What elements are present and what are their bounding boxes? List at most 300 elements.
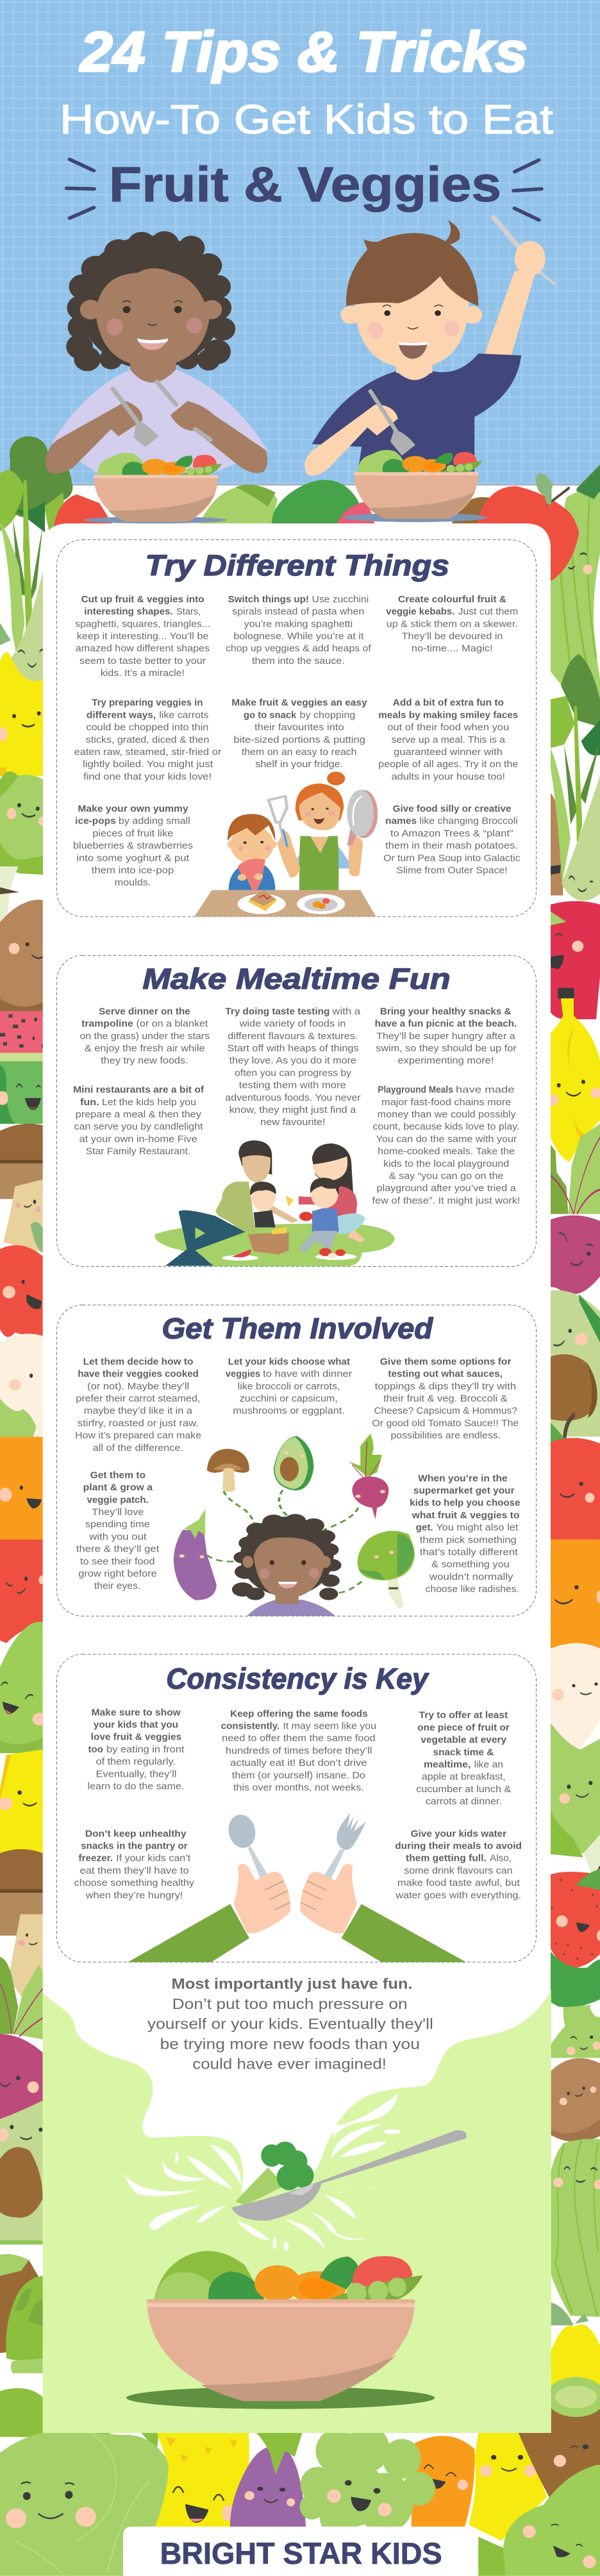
tip: water bbox=[395, 1828, 522, 1901]
tip: supermarket: what fruit & veggies to bbox=[412, 1510, 519, 1521]
cucumber bbox=[551, 2139, 600, 2317]
tip: ice-pops: them into ice-pop bbox=[92, 865, 174, 876]
cauliflower bbox=[0, 1334, 43, 1437]
kiwi bbox=[519, 2433, 600, 2501]
tip: smiley faces bbox=[378, 697, 518, 782]
tip: taste testing: they love. As you do it more bbox=[229, 1055, 356, 1066]
tip: taste testing: wide variety of foods in bbox=[239, 1019, 346, 1030]
tip: switch things up: Use zucchini bbox=[312, 594, 369, 605]
apple bbox=[551, 507, 579, 581]
tip: how cooked: stirfry, roasted or just raw. bbox=[78, 1418, 199, 1428]
mushroom bbox=[207, 1449, 249, 1492]
bottom veg band bbox=[0, 2325, 600, 2576]
illustration: girl eating bbox=[46, 231, 268, 523]
tip: easy snack: Make fruit & veggies an easy bbox=[231, 697, 367, 708]
logo text: BRIGHT STAR KIDS bbox=[160, 2536, 442, 2570]
tip: preparing veggies: different ways, bbox=[87, 709, 156, 720]
tip: how cooked: have their veggies cooked bbox=[78, 1369, 199, 1380]
tip: supermarket: You might also let bbox=[436, 1522, 519, 1533]
lemon bbox=[558, 988, 574, 999]
mother bbox=[269, 772, 378, 890]
tip: switch things up: bolognese. While you’re at it bbox=[233, 631, 364, 641]
tip: how cooked: maybe they’d like it in a bbox=[84, 1405, 193, 1416]
tip: taste testing: testing them with more bbox=[239, 1080, 346, 1091]
mushroom bbox=[0, 1849, 43, 1890]
tip: smiley faces: serve up a meal. This is a bbox=[392, 734, 506, 745]
tip: keep offering: them (or yourself) insane. Do bbox=[232, 1770, 365, 1781]
tip: playground meals bbox=[372, 1085, 521, 1206]
tip: show your love: by eating in front bbox=[106, 1744, 185, 1755]
tip: how cooked: Let them decide how to bbox=[83, 1356, 194, 1367]
girl bbox=[232, 1514, 342, 1616]
tip: every snack time bbox=[416, 1710, 511, 1807]
heading: Consistency is Key bbox=[166, 1663, 429, 1695]
tip: supermarket: supermarket get your bbox=[413, 1486, 515, 1496]
lemon bbox=[551, 2325, 600, 2373]
header plaid background bbox=[0, 0, 600, 484]
title line: 24 Tips & Tricks: 24 Tips & Tricks bbox=[79, 20, 528, 83]
tip: kebabs: veggie kebabs. bbox=[386, 606, 454, 617]
tip: sauces: toppings & dips they’ll try with bbox=[375, 1381, 516, 1392]
tip: creative names: them in their mash potatoes. bbox=[385, 840, 518, 851]
tip: shapes bbox=[75, 594, 210, 679]
face bbox=[396, 359, 433, 373]
tip: kebabs: no-time.... Magic! bbox=[412, 643, 493, 654]
big lettuce bbox=[0, 2429, 171, 2576]
title line: Fruit & Veggies: Fruit & Veggies bbox=[109, 157, 501, 212]
illustration: boy eating bbox=[304, 217, 555, 522]
shirt bbox=[52, 369, 268, 473]
tip: veggie patch: plant & grow a bbox=[83, 1482, 153, 1493]
tip: beach picnic: They’ll be super hungry after a bbox=[376, 1031, 515, 1042]
tip: ice-pops: Make your own yummy bbox=[78, 803, 188, 815]
tip: water: some drink flavours can bbox=[404, 1865, 513, 1876]
raspberry bbox=[551, 901, 600, 1019]
stalk bbox=[551, 2004, 600, 2058]
lemon bbox=[0, 1749, 43, 1853]
tip: preparing veggies: could be chopped into thin bbox=[86, 722, 208, 733]
tip: supermarket: wouldn’t normally bbox=[429, 1572, 513, 1582]
tip: ice-pops: into some yoghurt & put bbox=[76, 852, 190, 863]
tip: smiley faces: meals by making smiley faces bbox=[378, 709, 518, 720]
tip: beach picnic: Bring your healthy snacks & bbox=[380, 1006, 512, 1017]
white splash bbox=[124, 2094, 401, 2251]
tip: how cooked: (or not). Maybe they’ll bbox=[87, 1381, 189, 1392]
tip: keep offering: Keep offering the same foods bbox=[230, 1708, 368, 1719]
left veg border, upper bbox=[0, 444, 47, 1540]
tip: trampoline: on the grass) under the stars bbox=[79, 1031, 210, 1042]
fennel bbox=[13, 518, 43, 609]
parsley bbox=[561, 654, 600, 727]
shirt bbox=[312, 353, 521, 471]
tomato bbox=[563, 1412, 575, 1440]
tip: easy snack bbox=[231, 697, 367, 770]
tip: switch things up: chop up veggies & add heaps of bbox=[226, 643, 372, 654]
pear bbox=[0, 1622, 43, 1752]
tip: every snack time: like an bbox=[474, 1759, 503, 1770]
tip: veggie patch: grow right before bbox=[78, 1568, 157, 1579]
tip: preparing veggies bbox=[74, 697, 221, 782]
tip: easy snack: them on an easy to reach bbox=[242, 747, 356, 758]
tip: water: them getting full. bbox=[406, 1853, 487, 1864]
tip: supermarket: kids to help you choose bbox=[410, 1498, 521, 1509]
tip: water: make food taste awful, but bbox=[397, 1877, 521, 1888]
basket bbox=[248, 1232, 288, 1255]
tip: veggie patch bbox=[76, 1470, 160, 1591]
tip: keep offering: need to offer them the same food bbox=[222, 1733, 376, 1744]
closing message: yourself or your kids. Eventually they'll bbox=[147, 2015, 433, 2032]
right veg border, upper bbox=[545, 466, 600, 1539]
mother bbox=[299, 1143, 365, 1242]
tip: kebabs: Just cut them bbox=[458, 606, 518, 617]
tip: veggie patch: there & they’ll get bbox=[76, 1544, 160, 1555]
left column: lettuce bbox=[0, 2388, 43, 2437]
tip: unhealthy snacks: snacks in the pantry or bbox=[81, 1841, 188, 1851]
strawberry bbox=[551, 1872, 600, 1968]
tip: mini restaurants: Star Family Restaurant. bbox=[86, 1146, 190, 1157]
tip: creative names: like changing Broccoli bbox=[419, 816, 518, 827]
left hand with spoon bbox=[128, 1814, 290, 1962]
tip: mini restaurants: prepare a meal & then they bbox=[76, 1109, 202, 1120]
tip: creative names: Give food silly or creative bbox=[393, 803, 511, 815]
tip: sauces: Give them some options for bbox=[380, 1356, 512, 1367]
section: Make Mealtime Fun bbox=[56, 956, 536, 1266]
fennel and potato bbox=[564, 741, 600, 824]
bowl of salad bbox=[344, 513, 487, 522]
tip: show your love: Make sure to show bbox=[92, 1707, 181, 1718]
tip: sauces: their fruit & veg. Broccoli & bbox=[383, 1393, 508, 1404]
green leaf under pear bbox=[478, 2537, 505, 2576]
tip: kebabs: Create colourful fruit & bbox=[398, 594, 506, 605]
left veg border, lower bbox=[0, 1539, 47, 2373]
heading: Get Them Involved bbox=[162, 1312, 434, 1344]
eggplant bbox=[230, 2433, 306, 2533]
tip: creative names: Slime from Outer Space! bbox=[396, 865, 508, 876]
child two bbox=[285, 1178, 339, 1253]
tip: playground meals: have made bbox=[456, 1085, 515, 1096]
tip: unhealthy snacks: choose something healthy bbox=[74, 1877, 195, 1888]
tip: taste testing: new favourite! bbox=[260, 1117, 326, 1128]
watermelon bbox=[0, 1011, 43, 1055]
tip: preparing veggies: Try preparing veggies in bbox=[92, 697, 203, 708]
illustration: foreground vegetables behind bowls bbox=[0, 436, 600, 552]
mushroom bbox=[0, 1124, 43, 1162]
arm and fork bbox=[304, 405, 398, 476]
tip: veggie patch: their eyes. bbox=[94, 1580, 140, 1591]
tip: every snack time: carrots at dinner. bbox=[426, 1796, 502, 1807]
tip: choose veggies: to have with dinner bbox=[263, 1369, 352, 1380]
tip: taste testing: different flavours & textures. bbox=[228, 1031, 358, 1042]
tomato bbox=[0, 1539, 43, 1643]
tip: unhealthy snacks bbox=[74, 1828, 195, 1901]
tip: choose veggies: like broccoli or carrots, bbox=[238, 1381, 340, 1392]
tip: veggie patch: Get them to bbox=[90, 1470, 146, 1480]
tip: playground meals: major fast-food chains more bbox=[381, 1097, 511, 1108]
tip: preparing veggies: sticks, grated, diced & then bbox=[86, 734, 209, 745]
tip: smiley faces: guaranteed winner with bbox=[394, 747, 503, 758]
tip: playground meals: Playground Meals bbox=[378, 1085, 453, 1096]
tip: preparing veggies: lightly boiled. You might just bbox=[83, 759, 213, 770]
section: Get Them Involved bbox=[56, 1305, 536, 1616]
tip: supermarket: get. bbox=[416, 1522, 433, 1533]
tip: trampoline: they try new foods. bbox=[101, 1055, 188, 1066]
tip: veggie patch: with you out bbox=[88, 1531, 147, 1542]
tip: shapes: kids. It’s a miracle! bbox=[101, 668, 185, 679]
tip: smiley faces: out of their food when you bbox=[387, 722, 509, 733]
lettuce bbox=[551, 1750, 600, 1853]
tip: trampoline bbox=[79, 1006, 210, 1066]
illustration: spoon over salad bowl bbox=[124, 2094, 467, 2409]
orange bbox=[0, 1437, 43, 1540]
tip: playground meals: & say “you can go on the bbox=[389, 1171, 503, 1182]
grass bbox=[154, 1223, 395, 1266]
tip: kebabs: up & stick them on a skewer. bbox=[387, 618, 518, 629]
closing message: could have ever imagined! bbox=[192, 2055, 387, 2072]
tip: how cooked: prefer their carrot steamed, bbox=[76, 1393, 200, 1404]
tip: easy snack: their favourites into bbox=[254, 722, 344, 733]
tip: water: water goes with everything. bbox=[395, 1890, 521, 1901]
right hand with fork bbox=[300, 1813, 466, 1962]
potato bbox=[0, 900, 43, 1011]
tip: supermarket: When you’re in the bbox=[418, 1473, 508, 1484]
tip: playground meals: You can do the same with your bbox=[376, 1133, 517, 1144]
potato bbox=[551, 2058, 600, 2141]
tip: mini restaurants: at your own in-home Five bbox=[79, 1133, 197, 1144]
tip: keep offering bbox=[221, 1708, 376, 1793]
tip: switch things up bbox=[226, 594, 372, 666]
eggplant bbox=[174, 1509, 217, 1600]
tip: preparing veggies: like carrots bbox=[159, 709, 208, 720]
tip: taste testing: adventurous foods. You never bbox=[225, 1092, 361, 1103]
tip: show your love: your kids that you bbox=[94, 1719, 178, 1731]
lemon bbox=[0, 652, 44, 776]
tip: playground meals: home-cooked meals. Take the bbox=[378, 1146, 515, 1157]
tip: every snack time: mealtime, bbox=[424, 1759, 471, 1770]
watermelon plate bbox=[222, 1255, 258, 1260]
illustration: mother and son cooking bbox=[194, 772, 378, 917]
tip: show your love: learn to do the same. bbox=[87, 1781, 184, 1792]
tip: mini restaurants: can serve you by candlelight bbox=[74, 1121, 203, 1132]
green closing background bbox=[43, 1990, 551, 2433]
tip: show your love: Eventually, they’ll bbox=[96, 1768, 176, 1779]
tip: mini restaurants: fun. bbox=[80, 1097, 99, 1108]
tip: taste testing: Try doing taste testing bbox=[225, 1006, 329, 1017]
tip: shapes: spaghetti, squares, triangles... bbox=[75, 618, 210, 629]
tip: playground meals: count, because kids love to play. bbox=[372, 1121, 519, 1132]
tip: trampoline: & enjoy the fresh air while bbox=[85, 1043, 205, 1054]
tip: every snack time: vegetable at every bbox=[421, 1734, 507, 1745]
beet bbox=[551, 1216, 600, 1322]
tip: every snack time: cucumber at lunch & bbox=[416, 1784, 511, 1795]
table bbox=[194, 890, 376, 917]
right veg border, lower bbox=[551, 1539, 600, 2373]
tip: playground meals: kids to the local playground bbox=[383, 1158, 509, 1169]
face bbox=[80, 300, 101, 319]
tip: switch things up: Switch things up! bbox=[228, 594, 309, 605]
tip: ice-pops: by adding small bbox=[119, 816, 190, 827]
spoon bbox=[231, 2130, 467, 2221]
heading: Make Mealtime Fun bbox=[142, 962, 451, 995]
pear bbox=[503, 2465, 600, 2576]
tip: trampoline: trampoline bbox=[81, 1019, 133, 1030]
tip: shapes: Stars, bbox=[176, 606, 201, 617]
tip: sauces: possibilities are endless. bbox=[391, 1430, 501, 1441]
tip: easy snack: by chopping bbox=[300, 709, 355, 720]
tip: shapes: seem to taste better to your bbox=[79, 656, 206, 666]
tip: unhealthy snacks: freezer. bbox=[78, 1853, 113, 1864]
tip: choose veggies: mushrooms or eggplant. bbox=[233, 1405, 345, 1416]
tip: choose veggies: Let your kids choose what bbox=[228, 1356, 350, 1367]
title emphasis rays bbox=[67, 159, 542, 220]
title line: How-To Get Kids to Eat: How-To Get Kids to Eat bbox=[60, 96, 553, 142]
plates bbox=[238, 894, 286, 914]
closing message: be trying more new foods than you bbox=[160, 2035, 420, 2052]
hair bbox=[66, 231, 235, 371]
avocado bbox=[551, 1290, 600, 1437]
tip: mini restaurants bbox=[73, 1085, 204, 1157]
tip: water: Give your kids water bbox=[411, 1828, 506, 1839]
tip: ice-pops: ice-pops bbox=[75, 816, 116, 827]
tip: beach picnic: swim, so they should be up for bbox=[376, 1043, 517, 1054]
tip: preparing veggies: find one that your kids love! bbox=[83, 771, 212, 782]
tip: mini restaurants: Let the kids help you bbox=[102, 1097, 196, 1108]
child one bbox=[250, 1182, 276, 1228]
tip: supermarket: choose like radishes. bbox=[426, 1584, 519, 1595]
tip: shapes: amazed how different shapes bbox=[76, 643, 210, 654]
tip: veggie patch: spending time bbox=[85, 1519, 150, 1530]
tip: switch things up: you’re making spaghetti bbox=[244, 618, 353, 629]
tip: taste testing: know, they might just find a bbox=[229, 1105, 356, 1115]
cauliflower bbox=[551, 1643, 600, 1749]
tip: choose veggies: veggies bbox=[226, 1369, 260, 1380]
beet leaves bbox=[551, 1144, 569, 1214]
tip: every snack time: apple at breakfast, bbox=[422, 1772, 506, 1783]
tip: unhealthy snacks: If your kids can’t bbox=[116, 1853, 191, 1864]
lettuce bbox=[358, 1530, 415, 1609]
section: Try Different Things bbox=[56, 540, 536, 917]
tip: switch things up: them into the sauce. bbox=[252, 656, 345, 666]
tip: beach picnic: have a fun picnic at the beach. bbox=[375, 1019, 517, 1030]
tip: show your love: love fruit & veggies bbox=[91, 1732, 181, 1743]
tip: unhealthy snacks: eat them they’ll have to bbox=[79, 1865, 189, 1876]
lemon bbox=[153, 2433, 249, 2533]
tip: beach picnic: experimenting more! bbox=[397, 1055, 494, 1066]
bowl bbox=[147, 2300, 415, 2401]
tip: taste testing: often you can progress by bbox=[235, 1067, 352, 1078]
tip: kebabs bbox=[386, 594, 518, 654]
tip: smiley faces: people of all ages. Try it on the bbox=[378, 759, 518, 770]
right column: lemon and kiwi bbox=[551, 2325, 600, 2389]
beet leaves bbox=[0, 1957, 18, 2034]
tip: ice-pops: pieces of fruit like bbox=[92, 828, 173, 839]
tip: playground meals: playground after you’ve tried a bbox=[377, 1183, 516, 1194]
tip: show your love bbox=[87, 1707, 185, 1792]
closing message bbox=[147, 1975, 433, 2072]
beet bbox=[0, 2034, 43, 2119]
bowl of salad bbox=[83, 516, 226, 523]
closing message: Most importantly just have fun. bbox=[172, 1975, 413, 1992]
tip: preparing veggies: eaten raw, steamed, stir-fried or bbox=[74, 747, 221, 758]
tip: sauces: Cheese? Capsicum & Hommus? bbox=[374, 1405, 517, 1416]
tip: show your love: of them regularly. bbox=[96, 1756, 176, 1767]
closing message: Don’t put too much pressure on bbox=[172, 1996, 408, 2012]
tip: sauces: testing out what sauces, bbox=[388, 1369, 503, 1380]
tip: beach picnic bbox=[375, 1006, 517, 1066]
tip: creative names bbox=[383, 803, 521, 876]
tip: how cooked: How it’s prepared can make bbox=[75, 1430, 201, 1441]
artichoke bbox=[6, 2276, 43, 2361]
tip: playground meals: few of these”. It might just work! bbox=[372, 1195, 521, 1206]
tip: supermarket bbox=[410, 1473, 521, 1595]
boy bbox=[228, 814, 277, 890]
tip: every snack time: snack time & bbox=[433, 1747, 494, 1758]
tip: sauces: Or good old Tomato Sauce!! The bbox=[372, 1418, 519, 1428]
father bbox=[165, 1140, 299, 1266]
tip: shapes: Cut up fruit & veggies into bbox=[81, 594, 204, 605]
lettuce bbox=[0, 772, 44, 867]
dashed connectors bbox=[207, 1490, 363, 1593]
yellow lemon bbox=[469, 2433, 547, 2541]
tip: water: Also, bbox=[490, 1853, 512, 1864]
tip: water: during their meals to avoid bbox=[395, 1841, 522, 1851]
tip: trampoline: (or on a blanket bbox=[136, 1019, 208, 1030]
tip: veggie patch: veggie patch. bbox=[87, 1495, 149, 1505]
broccoli bbox=[299, 2426, 435, 2537]
apple plate bbox=[315, 1253, 356, 1260]
tip: smiley faces: adults in your house too! bbox=[392, 771, 505, 782]
apple bbox=[0, 1245, 43, 1339]
salad bbox=[154, 2251, 264, 2300]
logo plate bbox=[123, 2527, 478, 2576]
tip: every snack time: one piece of fruit or bbox=[417, 1722, 510, 1733]
tip: ice-pops: moulds. bbox=[115, 877, 151, 888]
hair bbox=[346, 233, 478, 306]
tip: easy snack: bite-sized portions & putting bbox=[233, 734, 365, 745]
tip: easy snack: shelf in your fridge. bbox=[255, 759, 343, 770]
white content panel bbox=[43, 523, 551, 2433]
tip: show your love: too bbox=[88, 1744, 103, 1755]
tip: supermarket: & something you bbox=[431, 1559, 510, 1570]
tip: sauces bbox=[372, 1356, 519, 1441]
orange bbox=[551, 1539, 600, 1648]
tip: keep offering: this over months, not weeks. bbox=[233, 1782, 364, 1793]
shadow bbox=[126, 2387, 435, 2409]
avocado bbox=[0, 2101, 43, 2241]
tip: switch things up: spirals instead of pasta when bbox=[232, 606, 364, 617]
tip: keep offering: actually eat it! But don’t drive bbox=[230, 1758, 367, 1768]
tip: veggie patch: They’ll love bbox=[92, 1507, 144, 1518]
tip: keep offering: hundreds of times before they’ll bbox=[226, 1745, 372, 1756]
tip: keep offering: consistently. bbox=[221, 1720, 279, 1732]
tip: how cooked: all of the difference. bbox=[93, 1443, 183, 1453]
tip: smiley faces: Add a bit of extra fun to bbox=[393, 697, 504, 708]
carrot bbox=[412, 2436, 475, 2533]
tip: ice-pops: blueberries & strawberries bbox=[73, 840, 193, 851]
main title bbox=[60, 20, 553, 212]
tip: supermarket: that’s totally different bbox=[420, 1547, 519, 1557]
tip: supermarket: them pick something bbox=[420, 1534, 517, 1545]
broccoli bbox=[551, 1951, 600, 2007]
beetroot bbox=[349, 1434, 388, 1520]
tip: taste testing bbox=[225, 1006, 361, 1128]
tip: unhealthy snacks: when they’re hungry! bbox=[85, 1890, 183, 1901]
tip: creative names: Or turn Pea Soup into Galactic bbox=[383, 852, 521, 863]
illustration: hands with spoon and fork bbox=[128, 1813, 466, 1962]
heading: Try Different Things bbox=[145, 549, 449, 582]
illustration: family picnic bbox=[154, 1140, 395, 1266]
tip: taste testing: with a bbox=[331, 1006, 361, 1017]
tip: easy snack: go to snack bbox=[244, 709, 297, 720]
